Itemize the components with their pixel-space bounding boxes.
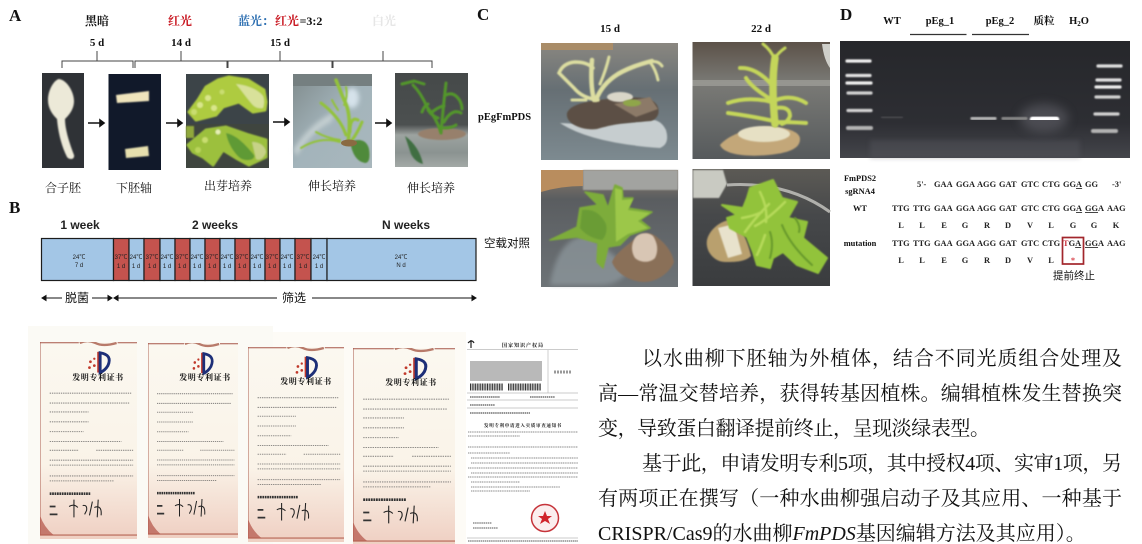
wild type sequence: CTG (1042, 204, 1061, 213)
temperature labels: 24℃ (130, 254, 142, 261)
description text: 以水曲柳下胚轴为外植体，结合不同光质组合处理及 (642, 347, 1122, 370)
wild type amino acids: R (984, 221, 991, 230)
temperature labels: 1 d (283, 264, 291, 270)
temperature labels: N d (396, 263, 406, 269)
stage labels: 脱菌 (65, 290, 89, 305)
captions under photos: 伸长培养 (407, 180, 455, 195)
temperature labels: 24℃ (161, 254, 173, 261)
wild type sequence: A (1098, 204, 1104, 213)
mutant sequence: TTG (913, 239, 931, 248)
week labels: N weeks (382, 218, 430, 232)
panel letter B: B (9, 198, 20, 217)
captions under photos: 合子胚 (45, 180, 82, 195)
row label pEgFmPDS: pEgFmPDS (478, 112, 531, 123)
temperature labels: 1 d (117, 264, 125, 270)
row labels: sgRNA4 (845, 187, 876, 196)
certificate 3 (248, 346, 344, 542)
mutant sequence: CTG (1042, 239, 1061, 248)
temperature labels (73, 254, 407, 270)
light condition labels: 红光 (168, 13, 192, 28)
temperature labels: 24℃ (251, 254, 263, 261)
wild type amino acids: D (1005, 221, 1011, 230)
sgRNA sequence: 5'- (917, 180, 927, 189)
sgRNA sequence: GG (1085, 180, 1099, 189)
row label control: 空载对照 (484, 236, 530, 250)
certificate 2 (148, 342, 238, 538)
description text (598, 347, 1122, 544)
light condition labels: =3:2 (300, 14, 322, 28)
stage labels: 筛选 (282, 290, 306, 305)
panel D: gel and sequence alignment (840, 5, 1130, 282)
wild type sequence: A (1076, 204, 1082, 213)
temperature labels: 37℃ (206, 254, 218, 261)
sgRNA sequence: A (1076, 180, 1082, 189)
light condition labels: 黑暗 (85, 13, 109, 28)
description text: 有两项正在撰写（一种水曲柳强启动子及其应用、一种基于 (598, 487, 1122, 510)
substantive examination notice: 发明专利申请进入实质审查通知书 (484, 422, 562, 429)
substantive examination notice: 国家知识产权局 (502, 342, 544, 349)
certificate 1 (40, 341, 137, 539)
certificate 1: 发明专利证书 (72, 372, 124, 382)
wild type sequence: TTG (913, 204, 931, 213)
temperature labels: 1 d (178, 264, 186, 270)
mutant sequence: GAA (934, 239, 953, 248)
wild type amino acids: K (1113, 221, 1120, 230)
captions under photos (45, 178, 455, 195)
gel lane labels: pEg_1 (926, 16, 954, 27)
wild type sequence: AAG (1107, 204, 1126, 213)
wild type amino acids: L (1048, 221, 1054, 230)
time labels (600, 23, 771, 35)
panel letter D: D (840, 5, 852, 24)
patent certificates (28, 326, 579, 544)
mutant sequence: T (1063, 239, 1069, 248)
temperature labels: 1 d (163, 264, 171, 270)
wild type sequence: GAT (999, 204, 1017, 213)
premature stop label: 提前终止 (1053, 269, 1095, 282)
temperature labels: 24℃ (313, 254, 325, 261)
gel lane labels: 质粒 (1034, 14, 1055, 27)
left ladder (847, 61, 871, 128)
photo: pEgFmPDS 15 d (541, 43, 678, 160)
light condition labels: 红光 (275, 13, 299, 28)
mutant sequence: GA (1069, 239, 1081, 248)
time labels: 15 d (600, 23, 620, 35)
alternating temperature bar (42, 238, 476, 280)
stage arrows (42, 296, 476, 300)
premature stop box (1062, 238, 1084, 264)
paper backdrop (28, 326, 273, 544)
mutant sequence: A (1098, 239, 1104, 248)
photo: elongation culture two (395, 73, 468, 167)
mutant sequence: TTG (892, 239, 910, 248)
temperature labels: 24℃ (221, 254, 233, 261)
week labels: 2 weeks (192, 218, 238, 232)
wild type sequence: GG (1063, 204, 1077, 213)
photo: shoot induction callus (186, 74, 269, 168)
backdrop between certificates (273, 332, 466, 544)
photo: hypocotyl explants (108, 74, 161, 170)
right ladder (1093, 66, 1121, 131)
sgRNA sequence: GTC (1021, 180, 1039, 189)
panel letter C: C (477, 5, 489, 24)
description text: 变，导致蛋白翻译提前终止，呈现淡绿表型。 (598, 417, 990, 440)
temperature labels: 1 d (268, 264, 276, 270)
wild type amino acids: V (1027, 221, 1033, 230)
temperature labels: 37℃ (176, 254, 188, 261)
description text: 基于此，申请发明专利5项，其中授权4项、实审1项，另 (642, 452, 1122, 475)
temperature labels: 24℃ (73, 254, 85, 261)
duration labels: 5 d (90, 37, 104, 49)
mutant amino acids: V (1027, 256, 1033, 265)
mutant amino acids: E (941, 256, 947, 265)
mutant sequence: GG (1085, 239, 1099, 248)
mutant amino acids: L (919, 256, 925, 265)
panel B: temperature regime bar (9, 198, 476, 305)
temperature labels: 37℃ (236, 254, 248, 261)
temperature labels: 1 d (299, 264, 307, 270)
row labels: WT (853, 204, 867, 213)
sgRNA sequence: AGG (977, 180, 997, 189)
description text: 高—常温交替培养，获得转基因植株。编辑植株发生替换突 (598, 382, 1122, 405)
temperature labels: 37℃ (115, 254, 127, 261)
sgRNA sequence: GAT (999, 180, 1017, 189)
temperature labels: 24℃ (395, 254, 407, 261)
wild type sequence: GG (1085, 204, 1099, 213)
temperature labels: 1 d (148, 264, 156, 270)
photo: pEgFmPDS 22 d (692, 42, 830, 159)
temperature labels: 1 d (132, 264, 140, 270)
temperature labels: 37℃ (266, 254, 278, 261)
light condition labels: 蓝光： (238, 13, 274, 28)
temperature labels: 1 d (238, 264, 246, 270)
sgRNA sequence: GAA (934, 180, 953, 189)
mutant amino acids: G (962, 256, 969, 265)
duration labels: 14 d (171, 37, 191, 49)
wild type amino acids: E (941, 221, 947, 230)
row labels (844, 174, 877, 248)
mutant sequence: GGA (956, 239, 975, 248)
wild type sequence: GAA (934, 204, 953, 213)
panel A: light treatment culture workflow (9, 6, 468, 195)
temperature labels: 37℃ (146, 254, 158, 261)
row labels: mutation (844, 239, 877, 248)
temperature labels: 24℃ (281, 254, 293, 261)
substantive examination notice (466, 336, 579, 544)
temperature labels: 37℃ (297, 254, 309, 261)
panel letter A: A (9, 6, 22, 25)
duration labels: 15 d (270, 37, 290, 49)
arrow (273, 119, 289, 125)
wild type amino acids: L (898, 221, 904, 230)
wild type amino acids: L (919, 221, 925, 230)
photo: control 22 d (692, 169, 830, 286)
arrow (166, 120, 182, 126)
sequence alignment (844, 174, 1126, 282)
row labels: FmPDS2 (844, 174, 876, 183)
arrow (375, 120, 391, 126)
temperature labels: 1 d (223, 264, 231, 270)
certificate 3: 发明专利证书 (280, 376, 332, 386)
gel lane labels: H (1069, 16, 1077, 27)
wild type sequence: GGA (956, 204, 975, 213)
mutant amino acids: R (984, 256, 991, 265)
certificate 4: 发明专利证书 (385, 377, 437, 387)
light condition labels (85, 13, 396, 28)
mutant amino acids: L (1048, 256, 1054, 265)
timeline brackets (62, 51, 432, 68)
gel lane labels: WT (883, 16, 901, 27)
light condition labels: 白光 (372, 13, 396, 28)
arrow (88, 120, 104, 126)
wild type sequence: AGG (977, 204, 997, 213)
temperature labels: 1 d (315, 264, 323, 270)
temperature labels: 1 d (193, 264, 201, 270)
temperature labels: 24℃ (191, 254, 203, 261)
wild type amino acids: G (1091, 221, 1098, 230)
mutant sequence: GAT (999, 239, 1017, 248)
temperature labels: 1 d (208, 264, 216, 270)
photo: control 15 d (541, 170, 678, 287)
wild type amino acids: G (1070, 221, 1077, 230)
photo: elongation culture one (293, 74, 372, 168)
sgRNA sequence: GG (1063, 180, 1077, 189)
time labels: 22 d (751, 23, 771, 35)
mutant amino acids: D (1005, 256, 1011, 265)
duration labels (90, 37, 290, 49)
panel C: phenotype photos (477, 5, 830, 287)
gel lane labels: 2 (1077, 20, 1081, 28)
mutant sequence: GTC (1021, 239, 1039, 248)
week labels: 1 week (60, 218, 100, 232)
mutant sequence: AAG (1107, 239, 1126, 248)
photo: zygotic embryo (42, 73, 84, 168)
wild type amino acids: G (962, 221, 969, 230)
certificate 2: 发明专利证书 (179, 372, 231, 382)
sgRNA sequence: GGA (956, 180, 975, 189)
gel lane labels: O (1081, 16, 1089, 27)
gel lane labels (883, 14, 1089, 28)
gel lane labels: pEg_2 (986, 16, 1014, 27)
wild type sequence: GTC (1021, 204, 1039, 213)
temperature labels: 7 d (75, 263, 83, 269)
sample bands (882, 117, 1056, 120)
sgRNA sequence: CTG (1042, 180, 1061, 189)
lane group underlines (910, 34, 1029, 36)
mutant amino acids: * (1071, 256, 1075, 265)
week labels (60, 218, 430, 232)
captions under photos: 出芽培养 (204, 178, 252, 193)
certificate 4 (353, 347, 455, 544)
captions under photos: 下胚轴 (116, 180, 152, 195)
gel image (840, 41, 1130, 158)
sgRNA sequence: -3' (1112, 180, 1121, 189)
mutant sequence: AGG (977, 239, 997, 248)
stage labels (65, 290, 306, 305)
temperature labels: 1 d (253, 264, 261, 270)
wild type sequence: TTG (892, 204, 910, 213)
captions under photos: 伸长培养 (308, 178, 356, 193)
mutant amino acids: L (898, 256, 904, 265)
